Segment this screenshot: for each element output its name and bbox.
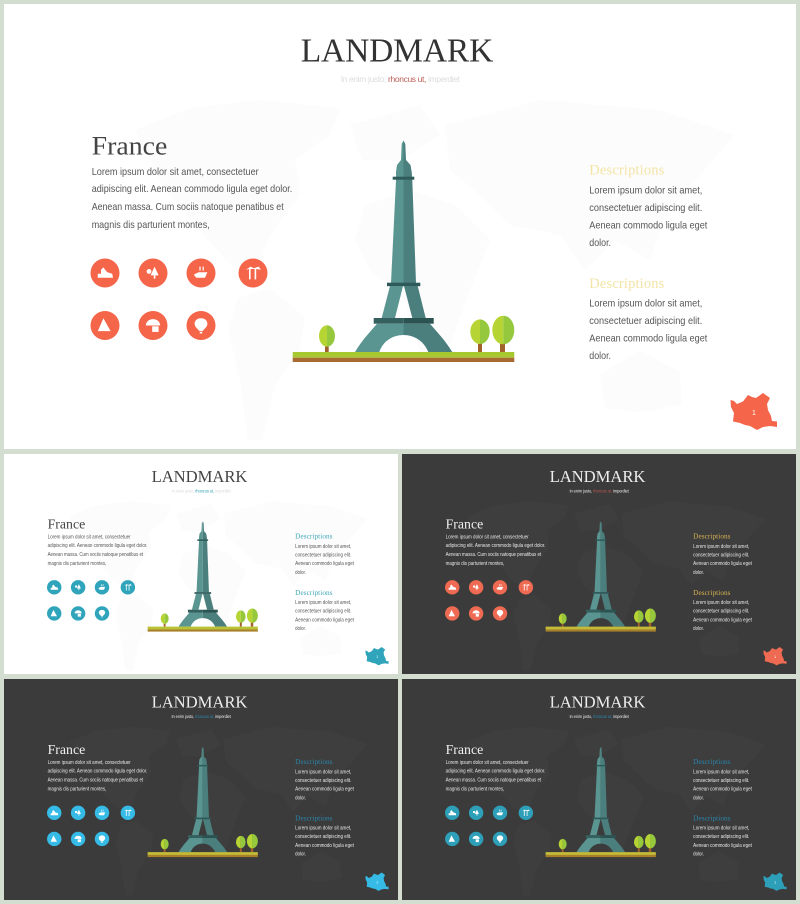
icon: trees xyxy=(469,580,483,595)
text block: description 1: Lorem ipsum dolor sit amet, xyxy=(295,769,351,775)
text block: France description: magnis dis parturient montes, xyxy=(48,786,106,792)
icon: parachute xyxy=(71,606,85,621)
text block: France description: magnis dis parturient montes, xyxy=(92,219,210,231)
text block: description 1: consectetuer adipiscing elit. xyxy=(589,202,702,214)
world map watermark xyxy=(467,501,766,670)
text block: description 2: consectetuer adipiscing elit. xyxy=(295,609,351,615)
text block: description 1 xyxy=(693,769,752,801)
icon: palm trees xyxy=(121,580,135,595)
icon: trees xyxy=(71,580,85,595)
text block: description 2 xyxy=(295,600,354,632)
text block: France description: adipiscing elit. Aenean commodo ligula eget dolor. xyxy=(446,543,545,549)
ground xyxy=(546,852,656,857)
text block: France description: Lorem ipsum dolor sit amet, consectetuer xyxy=(48,760,131,766)
panel: main slide, white with coral accents xyxy=(4,4,796,449)
icon: boat xyxy=(493,806,507,820)
text block: description 1: Aenean commodo ligula eget xyxy=(693,787,752,793)
heading: Descriptions 2: Descriptions xyxy=(589,276,665,292)
icon: camel xyxy=(445,580,459,595)
text block: France description xyxy=(446,535,545,567)
illustration: Eiffel Tower xyxy=(559,747,656,852)
page badge: France map xyxy=(763,647,787,665)
ground xyxy=(148,627,258,632)
heading: Descriptions 1: Descriptions xyxy=(589,162,665,178)
text block: description 1 xyxy=(295,769,354,801)
icon: boat xyxy=(95,580,109,595)
title: LANDMARK xyxy=(550,467,645,486)
text block: France description xyxy=(48,760,147,792)
icon grid xyxy=(47,580,135,621)
world map watermark xyxy=(69,727,368,896)
icon grid xyxy=(445,806,533,846)
text block: description 2: consectetuer adipiscing elit. xyxy=(693,609,749,615)
panel: dark slide with coral accents xyxy=(402,454,796,674)
icon: trees xyxy=(71,806,85,820)
text block: description 2 xyxy=(693,825,752,858)
title: LANDMARK xyxy=(152,467,247,486)
title: LANDMARK xyxy=(152,693,247,712)
illustration: Eiffel Tower xyxy=(161,521,258,627)
ground xyxy=(546,627,656,632)
subtitle: In enim justo, rhoncus ut, imperdiet xyxy=(171,488,232,493)
heading: Descriptions 2: Descriptions xyxy=(693,589,731,597)
text block: description 2: Aenean commodo ligula eget xyxy=(295,617,354,623)
icon: camel xyxy=(90,258,120,288)
page badge: France map xyxy=(730,393,777,430)
icon: tent xyxy=(445,832,459,846)
icon: trees xyxy=(469,806,483,820)
text block: France description: Aenean massa. Cum sociis natoque penatibus et xyxy=(48,552,144,558)
text block: description 2: consectetuer adipiscing elit. xyxy=(693,834,749,840)
text block: description 1: Aenean commodo ligula eget xyxy=(295,561,354,567)
text block: description 2: consectetuer adipiscing elit. xyxy=(589,315,702,327)
heading: Descriptions 2: Descriptions xyxy=(693,814,731,822)
heading: France: France xyxy=(446,742,483,757)
icon: parachute xyxy=(71,832,85,846)
world map watermark xyxy=(467,727,766,896)
text block: description 1: Lorem ipsum dolor sit amet, xyxy=(693,769,749,775)
title: LANDMARK xyxy=(550,693,645,712)
text block: description 1: dolor. xyxy=(693,570,704,576)
text block: France description: Lorem ipsum dolor sit amet, consectetuer xyxy=(92,166,259,178)
icon: trees xyxy=(138,258,168,288)
text block: description 2: Lorem ipsum dolor sit amet, xyxy=(693,600,749,606)
text block: description 1: consectetuer adipiscing elit. xyxy=(295,778,351,784)
heading: Descriptions 1: Descriptions xyxy=(693,532,731,540)
heading: Descriptions 1: Descriptions xyxy=(295,532,333,540)
text block: France description: Aenean massa. Cum sociis natoque penatibus et xyxy=(446,552,542,558)
text block: description 2: Aenean commodo ligula eget xyxy=(589,332,707,344)
icon: camel xyxy=(47,580,61,595)
text block: description 1: Aenean commodo ligula eget xyxy=(589,220,707,232)
heading: Descriptions 1: Descriptions xyxy=(295,758,333,766)
heading: Descriptions 2: Descriptions xyxy=(295,814,333,822)
text block: description 2: Aenean commodo ligula eget xyxy=(295,843,354,849)
text block: description 1 xyxy=(295,544,354,576)
text block: description 1: dolor. xyxy=(589,237,611,249)
text block: description 2: consectetuer adipiscing elit. xyxy=(295,834,351,840)
text block: France description: Aenean massa. Cum sociis natoque penatibus et xyxy=(92,201,284,213)
page badge: France map xyxy=(763,873,787,891)
text block: France description: Lorem ipsum dolor sit amet, consectetuer xyxy=(446,760,529,766)
text block: description 1: Lorem ipsum dolor sit amet, xyxy=(295,544,351,550)
ground xyxy=(148,852,258,857)
slide background xyxy=(402,679,796,900)
icon: hot air balloon xyxy=(95,606,109,621)
title: LANDMARK xyxy=(301,33,493,70)
icon: camel xyxy=(445,806,459,820)
text block: description 2: Lorem ipsum dolor sit amet, xyxy=(693,825,749,831)
icon: tent xyxy=(47,832,61,846)
slide background xyxy=(402,454,796,674)
ground xyxy=(293,352,514,362)
text block: France description: adipiscing elit. Aenean commodo ligula eget dolor. xyxy=(48,769,147,775)
text block: France description xyxy=(446,760,545,792)
text block: France description: magnis dis parturient montes, xyxy=(446,786,504,792)
page badge: France map: 1 xyxy=(376,880,378,884)
slide content xyxy=(445,693,787,896)
subtitle: In enim justo, rhoncus ut, imperdiet xyxy=(341,74,461,84)
text block: description 2: dolor. xyxy=(295,626,306,632)
text block: description 1: consectetuer adipiscing elit. xyxy=(693,778,749,784)
text block: France description: magnis dis parturient montes, xyxy=(48,561,106,567)
text block: description 1 xyxy=(589,184,707,249)
heading: France: France xyxy=(92,130,167,160)
text block: description 2 xyxy=(589,298,707,362)
illustration: Eiffel Tower xyxy=(161,747,258,852)
text block: description 2 xyxy=(693,600,752,632)
text block: description 2: Aenean commodo ligula eget xyxy=(693,843,752,849)
heading: France: France xyxy=(446,516,483,531)
text block: France description: adipiscing elit. Aenean commodo ligula eget dolor. xyxy=(92,183,292,195)
text block: France description: Aenean massa. Cum sociis natoque penatibus et xyxy=(446,777,542,783)
subtitle: In enim justo, rhoncus ut, imperdiet xyxy=(569,488,630,493)
icon: tent xyxy=(47,606,61,621)
icon: tent xyxy=(445,606,459,621)
slide background xyxy=(4,679,398,900)
slide background xyxy=(4,4,796,449)
text block: description 1: dolor. xyxy=(295,795,306,801)
icon: boat xyxy=(186,258,216,288)
slide content xyxy=(47,467,389,670)
icon: boat xyxy=(95,806,109,820)
text block: France description: Lorem ipsum dolor sit amet, consectetuer xyxy=(48,535,131,541)
text block: France description xyxy=(48,535,147,567)
icon: hot air balloon xyxy=(95,832,109,846)
icon: parachute xyxy=(469,606,483,621)
slide content xyxy=(445,467,787,670)
page badge: France map: 1 xyxy=(774,655,776,659)
text block: France description: adipiscing elit. Aenean commodo ligula eget dolor. xyxy=(446,769,545,775)
text block: description 2: dolor. xyxy=(295,852,306,858)
text block: France description: Aenean massa. Cum sociis natoque penatibus et xyxy=(48,777,144,783)
subtitle: In enim justo, rhoncus ut, imperdiet xyxy=(569,714,630,719)
text block: description 1 xyxy=(693,544,752,576)
icon: parachute xyxy=(469,832,483,846)
icon: palm trees xyxy=(238,258,268,288)
text block: France description: Lorem ipsum dolor sit amet, consectetuer xyxy=(446,535,529,541)
text block: description 1: dolor. xyxy=(693,795,704,801)
world map watermark xyxy=(135,100,735,440)
icon: boat xyxy=(493,580,507,595)
icon: hot air balloon xyxy=(493,832,507,846)
panel: dark slide with bright blue accents xyxy=(4,679,398,900)
text block: description 2: Lorem ipsum dolor sit amet, xyxy=(295,600,351,606)
icon grid xyxy=(47,806,135,846)
heading: Descriptions 1: Descriptions xyxy=(693,758,731,766)
icon grid xyxy=(445,580,533,621)
illustration: Eiffel Tower xyxy=(319,140,514,352)
text block: France description: magnis dis parturient montes, xyxy=(446,561,504,567)
text block: description 1: Lorem ipsum dolor sit amet, xyxy=(589,184,702,196)
text block: description 2: dolor. xyxy=(589,350,611,362)
slide content xyxy=(47,693,389,896)
icon: hot air balloon xyxy=(186,311,216,340)
text block: description 1: consectetuer adipiscing elit. xyxy=(295,552,351,558)
text block: France description: adipiscing elit. Aenean commodo ligula eget dolor. xyxy=(48,543,147,549)
page badge: France map xyxy=(365,647,389,665)
text block: description 1: dolor. xyxy=(295,570,306,576)
page badge: France map xyxy=(365,873,389,891)
text block: description 2: Aenean commodo ligula eget xyxy=(693,617,752,623)
world map watermark xyxy=(69,501,368,670)
icon: camel xyxy=(47,806,61,820)
text block: description 1: Aenean commodo ligula eget xyxy=(693,561,752,567)
page badge: France map: 1 xyxy=(774,880,776,884)
heading: Descriptions 2: Descriptions xyxy=(295,589,333,597)
heading: France: France xyxy=(48,742,85,757)
icon: hot air balloon xyxy=(493,606,507,621)
text block: description 2: dolor. xyxy=(693,852,704,858)
text block: description 1: Aenean commodo ligula eget xyxy=(295,787,354,793)
panel: dark slide with muted teal accents xyxy=(402,679,796,900)
text block: description 2 xyxy=(295,825,354,858)
icon grid xyxy=(90,258,268,340)
text block: description 2: dolor. xyxy=(693,626,704,632)
text block: description 1: Lorem ipsum dolor sit amet, xyxy=(693,544,749,550)
icon: tent xyxy=(90,311,120,340)
panel: white slide with teal accents xyxy=(4,454,398,674)
text block: France description xyxy=(92,166,292,231)
page badge: France map: 1 xyxy=(752,410,756,417)
slide background xyxy=(4,454,398,674)
subtitle: In enim justo, rhoncus ut, imperdiet xyxy=(171,714,232,719)
text block: description 1: consectetuer adipiscing elit. xyxy=(693,552,749,558)
icon: palm trees xyxy=(121,806,135,820)
icon: parachute xyxy=(138,311,168,340)
heading: France: France xyxy=(48,516,85,531)
icon: palm trees xyxy=(519,806,533,820)
text block: description 2: Lorem ipsum dolor sit amet, xyxy=(295,825,351,831)
page badge: France map: 1 xyxy=(376,655,378,659)
icon: palm trees xyxy=(519,580,533,595)
text block: description 2: Lorem ipsum dolor sit amet, xyxy=(589,298,702,310)
illustration: Eiffel Tower xyxy=(559,521,656,627)
